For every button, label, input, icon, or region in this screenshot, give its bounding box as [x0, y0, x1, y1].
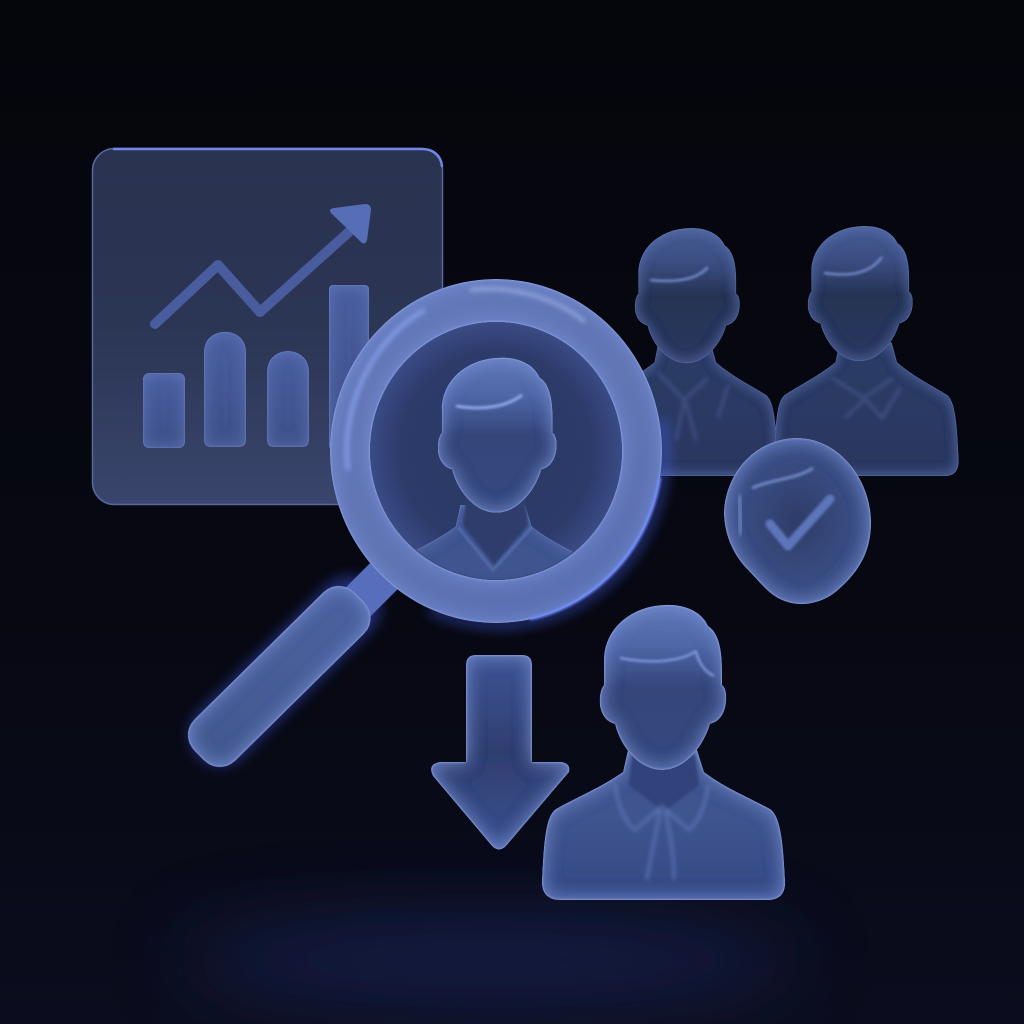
ring highlight: [470, 289, 585, 322]
lens ring: [330, 279, 662, 623]
lens background: [370, 322, 622, 580]
bar chart: [143, 285, 369, 450]
person: top left: [593, 228, 778, 476]
check mark: [770, 499, 830, 546]
arrow: down: [431, 655, 569, 850]
lens ring glow: [430, 420, 665, 625]
card top edge highlight: [114, 149, 442, 166]
collar: [458, 527, 532, 570]
handle glow: [175, 562, 395, 780]
person inside lens: [416, 358, 573, 579]
hair line highlight: [752, 468, 813, 488]
arrow shape: [431, 655, 569, 850]
person: bottom: [542, 605, 785, 900]
hair highlight: [456, 395, 522, 408]
magnifying glass: [175, 279, 665, 780]
handle grip: [179, 577, 380, 776]
floor glow: [180, 920, 800, 1000]
handle neck: [337, 547, 413, 623]
shirt collar: [832, 378, 900, 418]
body: [542, 750, 785, 900]
panel: analytics chart card: [92, 148, 442, 504]
shirt collar and tie: [658, 372, 728, 440]
hair highlight: [620, 651, 714, 676]
head: [438, 358, 557, 513]
head: [808, 226, 913, 361]
badge: check mark head: [724, 438, 871, 604]
badge shape: [724, 438, 871, 604]
body: [593, 342, 778, 476]
neck: [463, 500, 528, 565]
head: [600, 605, 726, 770]
body: [416, 505, 573, 579]
hair highlight: [650, 267, 708, 281]
card background: [92, 148, 442, 504]
collar and tie: [615, 785, 708, 880]
head: [635, 228, 740, 363]
neck shadow: [629, 755, 699, 812]
trend line arrow: [155, 204, 371, 324]
ring bottom right rim: [530, 477, 660, 619]
hair highlight: [824, 257, 882, 274]
person: top right: [774, 226, 959, 476]
body: [774, 342, 959, 476]
